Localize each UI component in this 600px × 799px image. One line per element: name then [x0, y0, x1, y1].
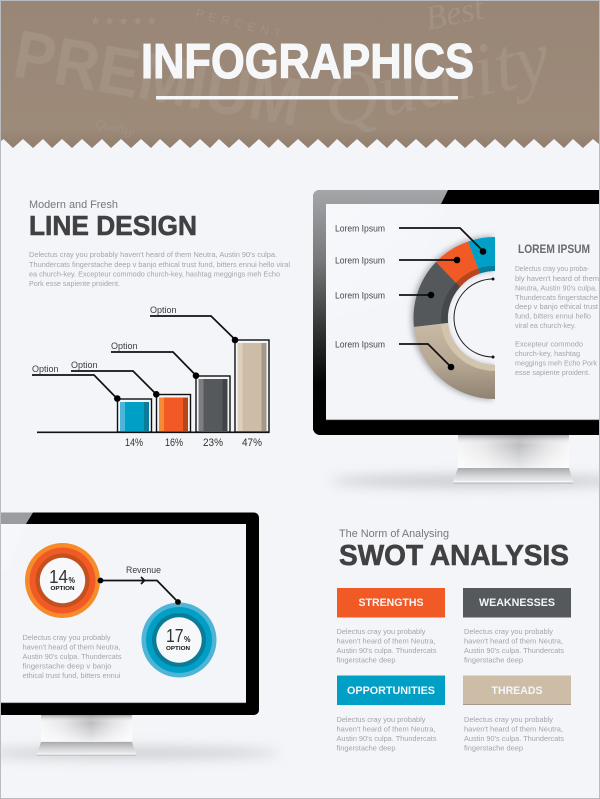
text block: monitor description: Austin 90's culpa. Thundercats — [22, 652, 122, 661]
percent labels: 16% — [165, 437, 183, 449]
label: revenue: Revenue — [126, 565, 161, 576]
title: INFOGRAPHICS — [141, 35, 474, 89]
monitor: top right — [313, 190, 600, 487]
section: swot heading: The Norm of Analysing — [339, 528, 449, 540]
text block: donut description: Delectus cray you proba- — [515, 264, 589, 273]
segment: orange — [436, 242, 480, 287]
text block: donut description: deep v banjo ethical trust — [515, 302, 598, 311]
callout labels — [335, 224, 385, 350]
panel: strengths — [337, 588, 445, 618]
section: swot heading: SWOT ANALYSIS — [339, 540, 569, 572]
monitor floor shadow — [330, 475, 600, 487]
text block: threads: Austin 90's culpa. Thundercats — [464, 734, 564, 743]
text block: donut description: viral ea church-key. — [515, 321, 576, 330]
text block: weaknesses: Austin 90's culpa. Thundercats — [464, 646, 564, 655]
text block: opportunities: Austin 90's culpa. Thundercats — [336, 734, 437, 743]
donut: 17% option — [142, 602, 216, 678]
value: 14%: 14 — [49, 567, 68, 587]
donut callouts — [335, 224, 486, 370]
option labels — [32, 305, 176, 375]
callout labels: Lorem Ipsum — [335, 256, 385, 266]
header watermark lettering: Quality — [94, 115, 136, 139]
text block: donut description: esse sapiente proident. — [515, 368, 590, 377]
monitor stand — [453, 435, 573, 484]
option labels: Option — [111, 341, 138, 352]
panel: opportunities — [337, 676, 445, 705]
label: option: OPTION — [166, 646, 190, 652]
donut chart — [411, 225, 509, 410]
panel: threads — [463, 676, 571, 705]
section: line design heading: Modern and Fresh — [29, 199, 118, 211]
title underline — [156, 96, 458, 100]
donut shadow — [411, 236, 493, 400]
header watermark lettering: PREMIUM — [8, 16, 307, 141]
monitor frame — [0, 512, 259, 715]
callout dots — [428, 248, 486, 370]
text block: line design description — [29, 250, 290, 288]
header watermark lettering: ★ ★ ★ ★ ★ — [90, 14, 157, 28]
text block: weaknesses: haven't heard of them Neutra, — [464, 636, 563, 646]
donut: 14% option: % — [68, 576, 75, 585]
panel: weaknesses: WEAKNESSES — [479, 597, 555, 609]
text block: line design description: Pork esse sapiente proident. — [29, 279, 120, 288]
text block: donut description: Neutra, Austin 90's culpa. — [515, 284, 597, 292]
bar: 14% — [118, 399, 152, 432]
inner arc — [454, 279, 493, 357]
text block: threads — [464, 715, 564, 752]
text block: opportunities: fingerstache deep — [336, 744, 396, 752]
text block: opportunities: Delectus cray you probably — [336, 715, 426, 724]
text block: monitor description: Delectus cray you probably — [22, 633, 111, 642]
callout labels: Lorem Ipsum — [335, 290, 385, 302]
text block: opportunities: haven't heard of them Neutra, — [336, 724, 436, 734]
text block: opportunities — [336, 715, 437, 752]
header watermark lettering: Quality — [316, 15, 557, 145]
text block: donut description: bly haven't heard of them — [515, 274, 599, 283]
text block: strengths: Austin 90's culpa. Thundercats — [336, 646, 437, 655]
option labels: Option — [71, 360, 98, 371]
monitor: bottom left — [0, 512, 280, 759]
header watermark lettering: PERCENT — [194, 6, 287, 42]
text block: line design description: Delectus cray you probably haven't heard of them Neutra, Austin 90's culpa. — [29, 250, 277, 259]
text block: line design description: Thundercats fingerstache deep v banjo ethical trust fund, bitters ennui hello viral — [29, 260, 290, 269]
text block: donut description — [515, 264, 599, 377]
monitor screen — [326, 204, 600, 420]
text block: weaknesses — [464, 627, 564, 664]
donut: 17% option: % — [184, 635, 190, 644]
text block: monitor description: haven't heard of them Neutra, — [22, 642, 120, 652]
text block: strengths: fingerstache deep — [336, 656, 396, 664]
text block: weaknesses: Delectus cray you probably — [464, 627, 553, 636]
callout labels: Lorem Ipsum — [335, 224, 385, 234]
text block: line design description: ea church-key. Excepteur commodo church-key, hashtag meggings meh Echo — [29, 270, 280, 278]
monitor screen — [0, 524, 246, 703]
bar: 47% — [235, 340, 269, 432]
bar: 16% — [156, 394, 190, 432]
zigzag edge — [0, 139, 600, 152]
section: line design heading: LINE DESIGN — [29, 210, 197, 241]
percent labels: 14% — [125, 437, 143, 449]
bar chart — [32, 305, 270, 449]
text block: donut description: Excepteur commodo — [515, 340, 583, 348]
leader lines — [32, 316, 235, 398]
callout lines — [399, 228, 483, 367]
donut: 14% option — [25, 543, 100, 618]
text block: monitor description: ethical trust fund, bitters ennui — [22, 671, 121, 680]
segment: blue — [468, 237, 495, 273]
text block: strengths: Delectus cray you probably — [336, 627, 426, 636]
percent labels: 47% — [242, 437, 262, 449]
revenue arrow — [98, 565, 181, 605]
text block: monitor description — [22, 633, 122, 680]
header watermark lettering — [8, 0, 557, 145]
leader dots — [114, 337, 238, 402]
percent labels: 23% — [203, 437, 223, 449]
text block: threads: Delectus cray you probably — [464, 715, 553, 724]
callout labels: Lorem Ipsum — [335, 340, 385, 350]
monitor stand — [37, 715, 136, 756]
text block: monitor description: fingerstache deep v banjo — [22, 662, 112, 670]
segment: grey — [414, 262, 460, 327]
panel: weaknesses — [463, 588, 571, 618]
monitor floor shadow — [0, 747, 280, 759]
panel: threads: THREADS — [492, 685, 542, 697]
text block: donut description: fund, bitters ennui hello — [515, 312, 591, 320]
text block: donut description: Thundercats fingerstache — [515, 293, 598, 302]
bar: 23% — [196, 376, 230, 432]
panel: strengths: STRENGTHS — [358, 597, 424, 609]
option labels: Option — [32, 364, 58, 375]
percent labels — [125, 437, 262, 449]
segment: tan — [414, 323, 495, 399]
text block: strengths — [336, 627, 437, 664]
text block: threads: fingerstache deep — [464, 744, 523, 752]
text block: strengths: haven't heard of them Neutra, — [336, 636, 436, 646]
text block: weaknesses: fingerstache deep — [464, 656, 523, 664]
panel: opportunities: OPPORTUNITIES — [347, 685, 435, 697]
option labels: Option — [150, 305, 176, 316]
label: option: OPTION — [50, 586, 74, 592]
value: 17%: 17 — [166, 626, 184, 646]
monitor frame — [313, 190, 600, 435]
text block: donut description: church-key, hashtag — [515, 349, 580, 358]
text block: donut description: meggings meh Echo Pork — [515, 358, 597, 368]
chart baseline — [37, 431, 270, 433]
header banner — [0, 0, 600, 152]
text block: threads: haven't heard of them Neutra, — [464, 724, 563, 734]
heading: lorem ipsum: LOREM IPSUM — [518, 244, 590, 256]
